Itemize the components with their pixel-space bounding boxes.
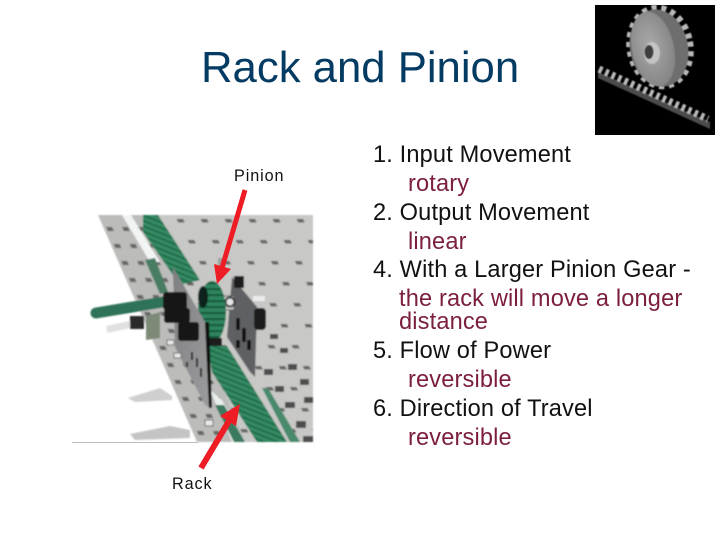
gear teeth [624, 3, 696, 91]
arrow: to pinion [214, 190, 245, 284]
text block: properties list: 1. Input Movement [373, 142, 571, 168]
text block: properties list: the rack will move a longer [399, 286, 682, 312]
pinion gear [198, 281, 226, 346]
shadows [128, 388, 172, 402]
text block: properties list: 4. With a Larger Pinion Gear - [373, 257, 691, 283]
text block: properties list: 6. Direction of Travel [373, 396, 593, 422]
side rail [98, 215, 245, 442]
arrow: to rack [201, 404, 240, 468]
front spacers [163, 292, 199, 341]
text block: properties list [373, 142, 691, 451]
rack upper [143, 215, 200, 285]
collar and bracket [146, 312, 160, 340]
board lower bolts [167, 340, 213, 426]
green side strip [145, 258, 168, 294]
text block: properties list: 5. Flow of Power [373, 338, 551, 364]
rear spacers [234, 276, 244, 288]
rack [598, 72, 710, 129]
board with holes [150, 215, 313, 442]
rack lower [208, 346, 287, 442]
photo baseline [72, 442, 198, 444]
white stripe [122, 215, 160, 262]
gear rim [623, 4, 695, 92]
gear hub [644, 42, 660, 64]
label: Rack: Rack [172, 475, 212, 493]
axle [96, 302, 163, 313]
gear face [625, 7, 681, 91]
text block: properties list: 2. Output Movement [373, 200, 589, 226]
bolt [222, 296, 234, 310]
text block: properties list: reversible [408, 425, 512, 451]
text block: properties list: distance [399, 309, 488, 335]
rear plate [227, 277, 257, 377]
text block: properties list: reversible [408, 367, 512, 393]
larger foreground holes [264, 334, 313, 442]
text block: properties list: rotary [408, 171, 469, 197]
text block: properties list: linear [408, 229, 467, 255]
title: Rack and Pinion [201, 43, 519, 92]
front plate [173, 267, 210, 408]
icon: 3D gear on rack [595, 3, 715, 135]
label: Pinion: Pinion [234, 167, 284, 185]
